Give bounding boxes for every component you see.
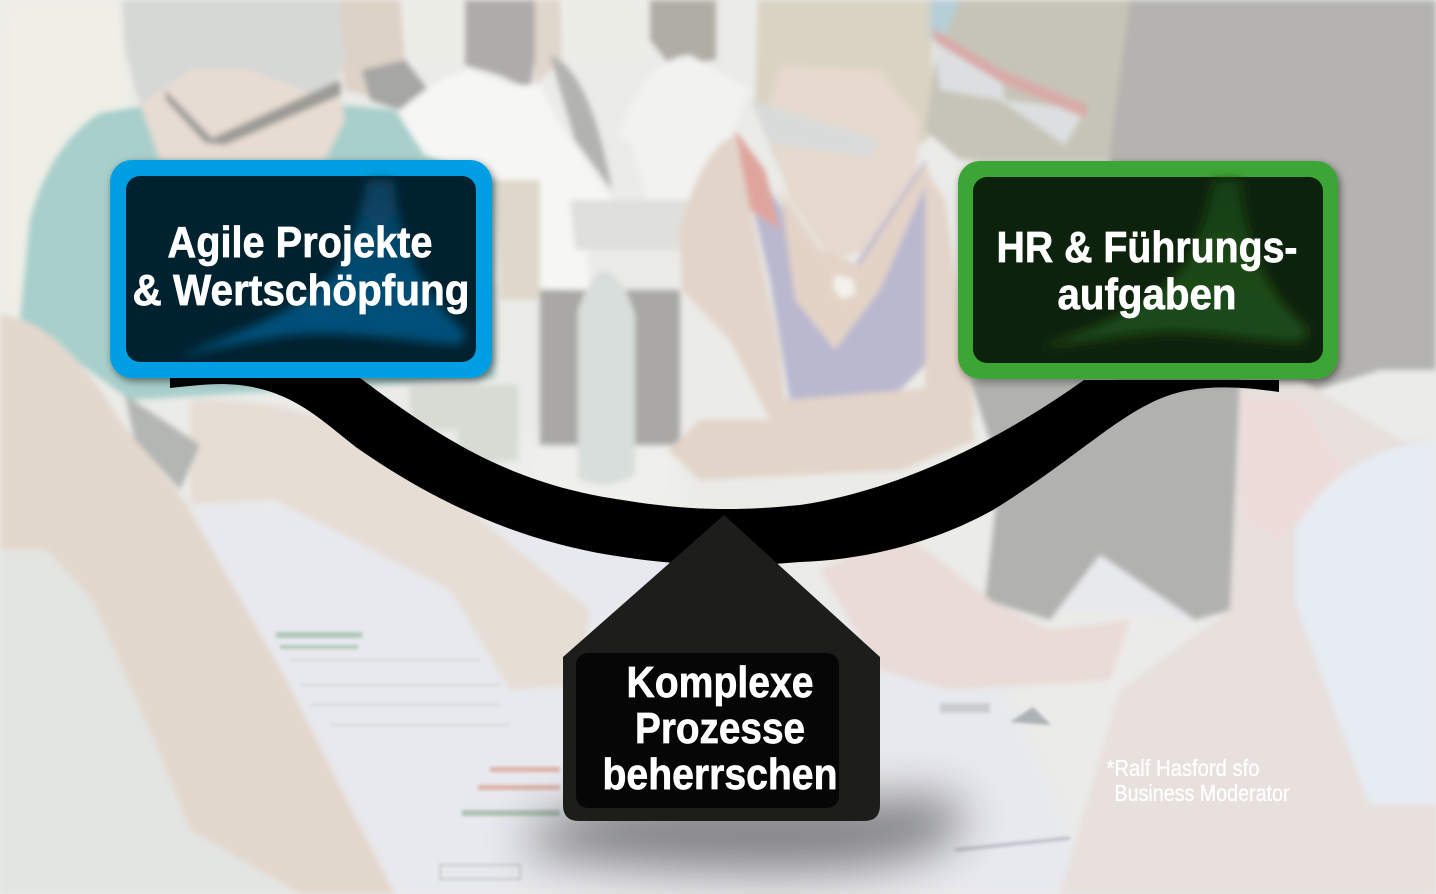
document details [276,632,362,638]
heading: HR und Führungsaufgaben: HR & Führungs- [996,223,1298,272]
photo credit [1106,755,1290,806]
background people [335,0,405,100]
woman centre [755,0,932,170]
heading: Agile Projekte und Wertschöpfung [132,218,470,315]
heading: HR und Führungsaufgaben [996,223,1298,319]
decorative spotlight [177,180,466,357]
left foreground person [0,315,395,894]
heading: Agile Projekte und Wertschöpfung: & Wertschöpfung [132,266,470,315]
balance beam [170,378,1279,565]
man left [20,105,495,400]
woman right: hair and glasses [930,0,970,40]
photo credit: *Ralf Hasford sfo [1106,755,1260,781]
photo credit: Business Moderator [1114,780,1290,806]
panel: HR und Führungsaufgaben [958,161,1338,379]
bottles [578,270,635,484]
heading: Komplexe Prozesse beherrschen [602,658,838,799]
right foreground person and mask [1060,380,1436,894]
decorative spotlight [1042,180,1309,347]
hands and forearms [190,400,590,690]
heading: Agile Projekte und Wertschöpfung: Agile Projekte [168,218,432,267]
panel: Komplexe Prozesse beherrschen (fulcrum) [563,515,880,821]
panel: Agile Projekte [110,160,492,378]
heading: Komplexe Prozesse beherrschen: Komplexe [626,658,814,707]
heading: Komplexe Prozesse beherrschen: beherrschen [602,750,838,799]
heading: Komplexe Prozesse beherrschen: Prozesse [635,704,805,753]
shadow under centre block [524,798,965,870]
heading: HR und Führungsaufgaben: aufgaben [1058,270,1236,319]
